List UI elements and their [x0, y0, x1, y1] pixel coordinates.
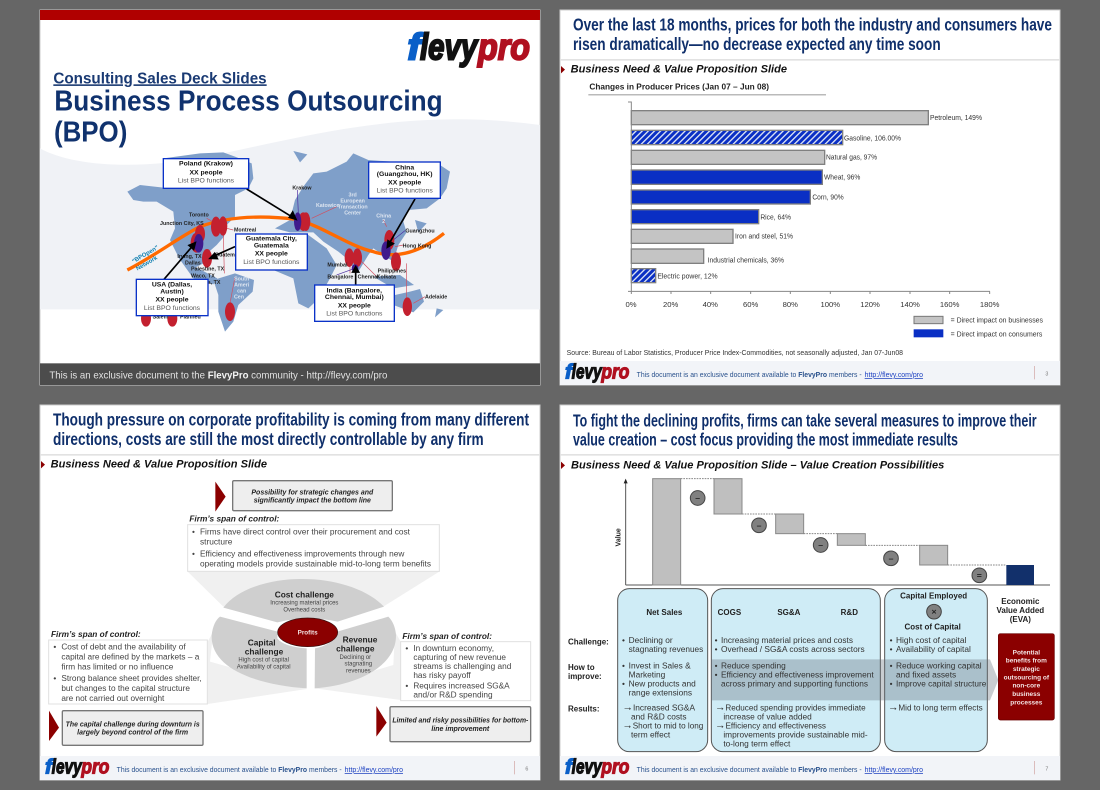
map labels: Palestine, TX: [191, 267, 225, 273]
world map: [127, 151, 450, 332]
row labels: improve:: [568, 672, 602, 681]
map labels: Junction City, KS: [160, 221, 204, 227]
EVA label: Economic: [1001, 597, 1040, 606]
footer: levy: [572, 361, 602, 383]
map labels: Kolkata: [377, 274, 396, 280]
callout: Poland: List BPO functions: [178, 178, 235, 185]
footer: pro: [600, 756, 629, 778]
text block: cost items: SG&A: [777, 608, 801, 617]
text block: cost items: improvements provide sustainable mid-: [723, 729, 868, 739]
row labels: How to: [568, 663, 595, 672]
text block: net sales: •: [622, 660, 625, 670]
callout: potential benefits: Potential: [1013, 649, 1040, 656]
waterfall chart: Value: [616, 528, 623, 546]
text block: capital span of control: capital are defined by the markets – a: [61, 651, 200, 661]
network curve: [127, 217, 444, 270]
bar chart: 140%: [900, 300, 920, 309]
bar chart: Rice, 64%: [760, 212, 791, 221]
callout: capital challenge: largely beyond control of the firm: [77, 730, 188, 737]
callout: USA: XX people: [155, 297, 189, 304]
callout: potential benefits: business: [1012, 691, 1041, 698]
callout: strategic changes: significantly impact the bottom line: [254, 498, 371, 505]
text block: capital span of control: firm has limited or no influence: [61, 661, 174, 671]
text block: cost items: COGS: [718, 608, 742, 617]
text block: capital items: [888, 592, 987, 713]
waterfall chart: –: [818, 540, 823, 550]
footer: levy: [52, 756, 82, 778]
sector: revenue challenge: revenues: [346, 668, 371, 674]
text block: capital items: •: [890, 644, 893, 654]
callout: revenue possibilities: line improvement: [431, 726, 490, 733]
source note: Source: Bureau of Labor Statistics, Producer Price Index-Commodities, not seasonally adjusted, Jan 07-Jun08: [567, 348, 903, 357]
footer: 3: [1045, 371, 1048, 377]
panel: profitability slide: [40, 405, 540, 780]
callout: India: [315, 285, 394, 321]
text block: capital span of control: Cost of debt and the availability of: [61, 641, 186, 651]
footer: 7: [1045, 766, 1048, 772]
callout: revenue possibilities: Limited and risky possibilities for bottom-: [392, 718, 529, 725]
sector: revenue challenge: Revenue: [343, 635, 378, 645]
text block: cost items: →Efficiency and effectiveness: [715, 719, 826, 731]
footer: levy: [572, 756, 602, 778]
footer: http://flevy.com/pro: [865, 370, 923, 379]
text block: capital items: Availability of capital: [896, 644, 971, 654]
footer: pro: [600, 361, 629, 383]
sector: capital challenge: Availability of capital: [237, 664, 291, 670]
subtitle: Consulting Sales Deck Slides: [53, 70, 267, 87]
bar chart: 100%: [821, 300, 840, 309]
text block: cost span of control: •: [192, 549, 195, 559]
text block: net sales: Marketing: [629, 669, 666, 679]
text block: cost items: R&D: [841, 608, 858, 617]
text block: net sales: Declining or: [629, 635, 673, 645]
text block: cost span of control: Firm’s span of control:: [189, 514, 280, 523]
map labels: Planned: [180, 314, 201, 320]
text block: capital span of control: [49, 630, 207, 704]
arrows to locations: [164, 189, 415, 285]
text block: cost items: •: [715, 669, 718, 679]
callout: India: Chennai, Mumbai): [325, 294, 384, 301]
text block: cost items: to-long term effect: [723, 738, 791, 748]
footer: f: [565, 756, 574, 778]
text block: revenue span of control: [401, 632, 531, 701]
map labels: Toronto: [189, 213, 209, 219]
map labels: Mumbai: [327, 263, 348, 269]
heading: Though pressure on corporate profitability is coming from many different: [53, 410, 529, 430]
arrow band: how to improve: [711, 659, 998, 700]
text block: cost items: Reduce spending: [721, 660, 786, 670]
sector: revenue challenge: stagnating: [345, 662, 372, 668]
bar chart: 120%: [860, 300, 880, 309]
text block: revenue span of control: and/or R&D spending: [413, 690, 493, 700]
sector: cost challenge: Increasing material prices: [270, 601, 338, 607]
heading: [573, 410, 1037, 450]
title: (BPO): [54, 117, 127, 149]
bar chart: Iron and steel, 51%: [735, 232, 793, 241]
callout: potential benefits: processes: [1010, 699, 1043, 706]
callout: USA: [136, 279, 208, 316]
sector: capital challenge: challenge: [245, 646, 284, 656]
location leader lines: [200, 190, 425, 303]
text block: cost items: Increasing material prices and costs: [721, 635, 853, 645]
map labels: a, TX: [208, 280, 221, 286]
map labels: Irving, TX: [177, 254, 202, 260]
callout: potential benefits: benefits from: [1006, 658, 1047, 665]
text block: net sales: →Short to mid to long: [622, 719, 704, 731]
EVA label: Value Added: [997, 606, 1044, 615]
map labels: Center: [344, 211, 361, 217]
legend: = Direct impact on businesses: [951, 316, 1043, 325]
text block: cost items: Efficiency and effectiveness improvement: [721, 669, 874, 679]
panel: costs: [711, 589, 880, 752]
sector: capital challenge: [212, 617, 307, 688]
map labels: Hong Kong: [403, 243, 431, 249]
callout: India: List BPO functions: [326, 311, 383, 318]
text block: net sales: Invest in Sales &: [629, 660, 691, 670]
callout: strategic changes: Possibility for strategic changes and: [251, 489, 374, 496]
chart title: Changes in Producer Prices (Jan 07 – Jun 08): [589, 81, 769, 91]
callout: China: List BPO functions: [377, 188, 433, 195]
text block: cost items: Overhead / SG&A costs across sectors: [721, 644, 865, 654]
section heading: Business Need & Value Proposition Slide: [51, 459, 267, 471]
bar chart: 60%: [743, 300, 759, 309]
map labels: Chennai: [358, 274, 379, 280]
text block: net sales: range extensions: [629, 687, 692, 697]
sector: cost challenge: Cost challenge: [275, 590, 334, 600]
bar chart: Corn, 90%: [812, 192, 844, 201]
footer: This document is an exclusive document available to FlevyPro members -: [117, 765, 342, 774]
footer: [40, 756, 540, 780]
text block: revenue span of control: •: [405, 681, 408, 691]
footer bar: This is an exclusive document to the FlevyPro community - http://flevy.com/pro: [49, 370, 388, 381]
text block: net sales: and R&D costs: [631, 711, 687, 721]
text block: net sales: term effect: [631, 729, 671, 739]
logo: flevypro: [407, 25, 530, 67]
callout: capital challenge: The capital challenge during downturn is: [66, 721, 200, 728]
text block: capital items: →Mid to long term effects: [888, 701, 983, 713]
map labels: European: [340, 199, 365, 205]
text block: cost span of control: Efficiency and effectiveness improvements through new: [200, 549, 405, 559]
bar chart: 180%: [980, 300, 1000, 309]
funnels: [188, 572, 439, 704]
callout: India: India (Bangalore,: [327, 287, 382, 294]
footer: This document is an exclusive document available to FlevyPro members -: [637, 765, 862, 774]
footer: [560, 756, 1060, 780]
logo: flevypro: levy: [420, 25, 479, 67]
callout: China: China: [395, 164, 414, 171]
text block: cost items: [715, 608, 874, 748]
callout: Poland: Poland (Krakow): [179, 161, 233, 168]
text block: capital span of control: •: [53, 641, 56, 651]
callout: Guatemala: XX people: [255, 251, 288, 258]
footer: f: [45, 756, 54, 778]
text block: capital items: Reduce working capital: [896, 660, 982, 670]
location markers: [141, 212, 412, 327]
sector: revenue challenge: Declining or: [340, 655, 371, 661]
bar chart: 160%: [940, 300, 960, 309]
map labels: Guatem: [215, 253, 235, 259]
bar chart: Wheat, 96%: [824, 173, 861, 182]
sector: revenue challenge: [315, 617, 396, 688]
sector: capital challenge: Capital: [248, 638, 276, 648]
callout: China: (Guangzhou, HK): [377, 171, 433, 178]
callout: potential benefits: strategic: [1013, 666, 1040, 673]
map labels: Transaction: [338, 205, 368, 211]
legend: = Direct impact on consumers: [951, 329, 1043, 338]
text block: capital span of control: but changes to the capital structure: [61, 683, 190, 693]
heading: directions, costs are still the most directly controllable by any firm: [53, 429, 484, 449]
panel: title slide: [40, 10, 540, 385]
heading: value creation – cost focus providing the most immediate results: [573, 430, 958, 450]
heading: [573, 15, 1052, 54]
sector: revenue challenge: challenge: [336, 644, 375, 654]
text block: net sales: •: [622, 678, 625, 688]
callout: USA: List BPO functions: [144, 305, 201, 312]
EVA label: (EVA): [1010, 615, 1031, 624]
text block: revenue span of control: has risky payoff: [413, 670, 471, 680]
text block: cost span of control: •: [192, 527, 195, 537]
profits hub: [278, 618, 338, 647]
bar chart: Petroleum, 149%: [930, 113, 982, 122]
callout: Guatemala: List BPO functions: [243, 259, 300, 266]
text block: capital items: Improve capital structure: [896, 678, 987, 688]
text block: cost items: →Reduced spending provides immediate: [715, 701, 866, 713]
text block: capital span of control: are not carried out overnight: [61, 693, 165, 703]
callout: potential benefits: non-core: [1012, 683, 1041, 690]
text block: capital items: High cost of capital: [896, 635, 967, 645]
sector: capital challenge: High cost of capital: [238, 657, 289, 663]
waterfall chart: =: [977, 570, 982, 580]
text block: revenue span of control: capturing of new revenue: [413, 652, 506, 662]
text block: capital items: ×: [931, 607, 937, 617]
callout: potential benefits: [998, 634, 1054, 720]
bar chart: 40%: [703, 300, 718, 309]
EVA label: [997, 597, 1044, 624]
callout: India: XX people: [338, 302, 371, 309]
callout: Guatemala: Guatemala: [254, 242, 289, 249]
text block: cost span of control: [188, 514, 439, 571]
callout: Guatemala: [236, 234, 307, 270]
map labels: Adelaide: [425, 294, 447, 300]
section heading: Business Need & Value Proposition Slide – Value Creation Possibilities: [571, 459, 944, 471]
map labels: [153, 186, 447, 320]
panel: producer prices slide: [560, 10, 1060, 385]
waterfall chart: –: [695, 493, 700, 503]
text block: capital items: •: [890, 678, 893, 688]
text block: cost items: •: [715, 660, 718, 670]
bar chart: [625, 102, 1000, 309]
section heading: Business Need & Value Proposition Slide: [571, 64, 787, 76]
map labels: South: [234, 276, 249, 282]
text block: capital items: •: [890, 635, 893, 645]
map labels: 3rd: [349, 193, 357, 199]
text block: capital items: and fixed assets: [896, 669, 956, 679]
panel: value creation slide: [560, 405, 1060, 780]
footer: [560, 361, 1060, 385]
footer: 6: [525, 766, 528, 772]
map labels: China: [376, 213, 391, 219]
callout: USA: Austin): [160, 288, 184, 295]
callout: strategic changes: [215, 481, 392, 512]
heading: risen dramatically—no decrease expected any time soon: [573, 34, 941, 54]
map labels: Ameri: [234, 282, 250, 288]
text block: net sales: Net Sales: [646, 608, 683, 617]
text block: cost span of control: structure: [200, 537, 233, 547]
panel: capital: [885, 589, 987, 752]
text block: capital span of control: •: [53, 673, 56, 683]
title: Business Process Outsourcing: [54, 86, 443, 118]
text block: net sales: •: [622, 635, 625, 645]
profits hub: Profits: [298, 630, 318, 637]
map labels: Cen: [234, 294, 244, 300]
sector: cost challenge: Overhead costs: [283, 608, 325, 614]
bar chart: 20%: [663, 300, 679, 309]
footer: f: [565, 361, 574, 383]
text block: cost items: across primary and supporting functions: [721, 678, 868, 688]
row labels: Challenge:: [568, 637, 609, 646]
waterfall chart: [616, 479, 1050, 585]
text block: net sales: stagnating revenues: [629, 644, 703, 654]
text block: revenue span of control: Firm’s span of control:: [402, 632, 492, 641]
text block: net sales: [622, 608, 704, 739]
heading: [53, 410, 529, 449]
sector: cost challenge: [223, 579, 384, 622]
callout: China: [369, 162, 440, 198]
text block: net sales: New products and: [629, 678, 696, 688]
network label: Network: [135, 255, 159, 272]
text block: cost span of control: operating models provide sustainable mid-to-long term benefits: [200, 559, 431, 569]
map labels: Salem: [153, 314, 169, 320]
footer: This document is an exclusive document available to FlevyPro members -: [637, 370, 862, 379]
bar chart: Gasoline, 106.00%: [844, 133, 901, 142]
map labels: Krakow: [292, 186, 312, 192]
map labels: Waco, TX: [191, 273, 215, 279]
callout: China: XX people: [388, 179, 421, 186]
waterfall chart: –: [757, 520, 762, 530]
title: [54, 86, 443, 149]
map labels: Philippines: [378, 269, 406, 275]
text block: revenue span of control: Requires increased SG&A: [413, 681, 510, 691]
callout: capital challenge: [49, 711, 203, 745]
waterfall chart: –: [889, 553, 894, 563]
bar chart: 80%: [783, 300, 798, 309]
bar chart: 0%: [625, 300, 637, 309]
text block: capital span of control: Strong balance sheet provides shelter,: [61, 673, 202, 683]
map labels: can: [237, 289, 246, 295]
text block: capital items: Cost of Capital: [904, 623, 961, 632]
text block: capital items: Capital Employed: [900, 592, 967, 601]
callout: USA: USA (Dallas,: [152, 282, 192, 289]
panel: net sales: [618, 589, 708, 752]
callout: Poland: XX people: [189, 169, 223, 176]
map labels: 2: [382, 219, 385, 225]
text block: cost span of control: Firms have direct control over their procurement and cost: [200, 527, 411, 537]
text block: net sales: →Increased SG&A: [622, 701, 695, 713]
map labels: Dallas: [185, 261, 201, 267]
text block: revenue span of control: •: [405, 643, 408, 653]
network label: “BPOpen”: [131, 245, 160, 265]
bar chart: Industrial chemicals, 36%: [708, 256, 784, 265]
footer: http://flevy.com/pro: [865, 765, 923, 774]
footer: http://flevy.com/pro: [345, 765, 403, 774]
text block: cost items: •: [715, 635, 718, 645]
footer: pro: [80, 756, 109, 778]
map labels: Montreal: [234, 228, 257, 234]
row labels: Results:: [568, 704, 600, 713]
map labels: Bangalore: [327, 274, 353, 280]
text block: revenue span of control: In downturn economy,: [413, 643, 494, 653]
text block: capital span of control: Firm’s span of control:: [51, 630, 141, 639]
text block: capital items: •: [890, 660, 893, 670]
logo: flevypro: pro: [477, 25, 530, 67]
footer bar: [40, 363, 540, 385]
legend: [914, 316, 1043, 338]
map labels: Guangzhou: [405, 228, 435, 234]
callout: Guatemala: Guatemala City,: [246, 236, 297, 243]
callout: revenue possibilities: [376, 706, 531, 742]
callout: potential benefits: outsourcing of: [1004, 674, 1050, 681]
bar chart: Electric power, 12%: [657, 271, 718, 280]
text block: revenue span of control: streams is challenging and: [413, 661, 512, 671]
row labels: [568, 637, 609, 713]
text block: cost items: •: [715, 644, 718, 654]
bar chart: Natural gas, 97%: [826, 153, 877, 162]
logo: flevypro: f: [407, 25, 424, 67]
map labels: Katowice: [316, 203, 339, 209]
text block: cost items: increase of value added: [723, 711, 812, 721]
callout: Poland: [163, 159, 249, 188]
